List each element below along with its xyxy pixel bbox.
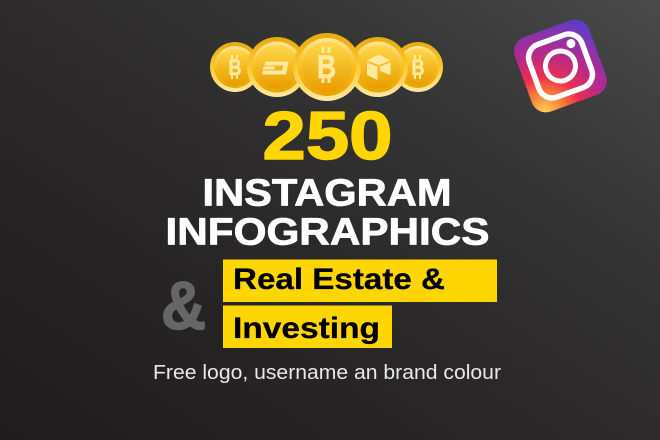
coin: right bitcoin: B	[412, 55, 424, 80]
ampersand: &	[161, 268, 206, 344]
heading: infographics: INFOGRAPHICS	[166, 212, 490, 254]
coin: center bitcoin	[293, 33, 361, 101]
caption: Free logo, username an brand colour	[153, 362, 501, 384]
heading: 250: 250	[262, 98, 392, 174]
coin: neo	[348, 37, 408, 97]
coin: left bitcoin	[210, 42, 260, 92]
label: real estate	[223, 260, 497, 302]
coin: center bitcoin: B	[317, 49, 336, 85]
heading: instagram: INSTAGRAM	[202, 172, 452, 214]
label: investing	[223, 306, 392, 348]
coin: left bitcoin: B	[228, 55, 242, 80]
coin: dash	[247, 37, 307, 97]
label: investing: Investing	[233, 312, 380, 345]
icon: instagram logo	[510, 15, 611, 117]
coin: right bitcoin	[393, 42, 443, 92]
label: real estate: Real Estate &	[233, 263, 445, 296]
coin row	[210, 33, 443, 101]
